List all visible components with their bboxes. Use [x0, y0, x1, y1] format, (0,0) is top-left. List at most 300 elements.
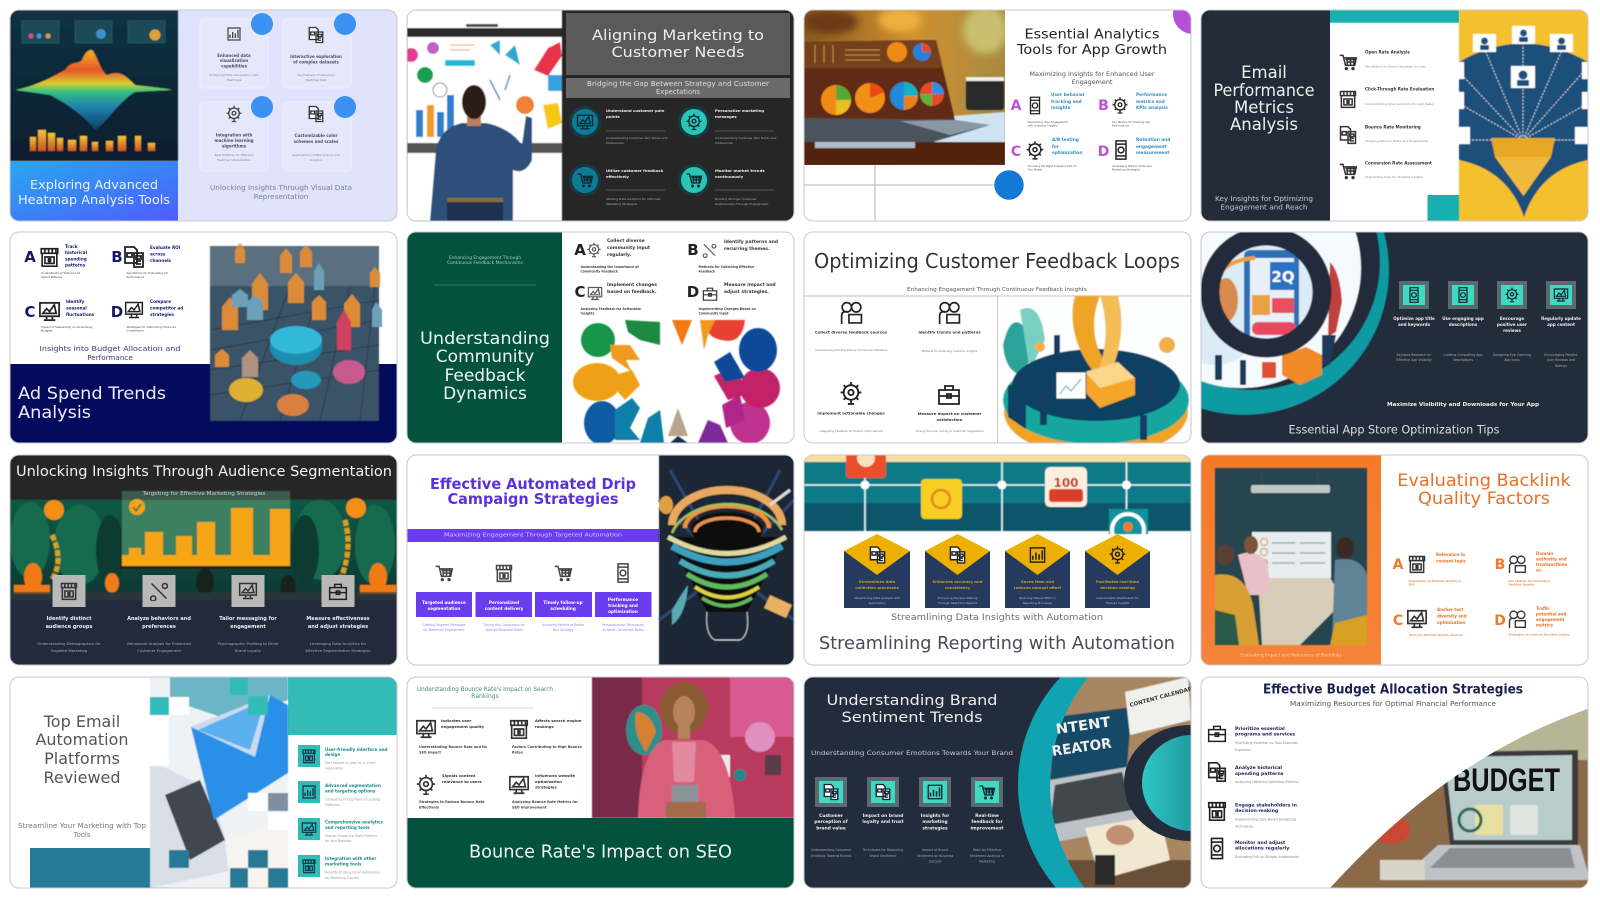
card: Optimizing Customer Feedback Loops	[804, 232, 1191, 457]
card: Exploring Advanced Heatmap Analysis Tools	[10, 10, 397, 221]
item C: based on feedback.	[607, 288, 657, 294]
item: understand pain points	[569, 106, 667, 145]
item: collect	[815, 303, 888, 352]
item B: Backlink Quality	[1508, 582, 1534, 586]
title band: Heatmap Analysis Tools	[18, 192, 170, 206]
benefit: real-time: Facilitates real-time	[1096, 578, 1139, 584]
item A: A	[574, 241, 586, 259]
network banner illustration	[804, 449, 1191, 546]
item: engage: Engage stakeholders in	[1235, 802, 1297, 808]
item A: tracking and	[1051, 98, 1082, 104]
platform: integration: Benefits of Using Email Automation	[325, 870, 380, 874]
title box: Customer Needs	[612, 45, 744, 61]
platform: interface	[298, 745, 387, 770]
item A	[1011, 92, 1086, 128]
item: website optimization	[510, 772, 578, 810]
tip: update content: Encouraging Positive	[1544, 353, 1578, 357]
step: personalized	[476, 566, 532, 632]
subtitle: Maximizing Insights for Enhanced User	[1030, 70, 1155, 78]
metric: bounce	[1340, 124, 1429, 143]
item: tailor messaging: Brand Loyalty	[235, 648, 262, 652]
item D	[687, 282, 776, 316]
item: content relevance: Signals content	[442, 772, 476, 778]
tip: reviews: positive user	[1497, 322, 1527, 326]
item D: Investments	[126, 328, 144, 332]
factor: loyalty: Brand Sentiment	[870, 854, 897, 858]
item D: Traffic	[1536, 606, 1550, 610]
metric: open rate: Key Metrics for Email Campaign Success	[1365, 64, 1426, 68]
item: analyze behaviors: preferences	[142, 624, 176, 630]
card: Bounce Rate's Impact on SEO	[407, 677, 794, 888]
factor: feedback: Sentiment Analysis in	[970, 854, 1004, 858]
factor: feedback: feedback for	[971, 818, 1003, 824]
content creator desk photo: REATOR	[1051, 736, 1113, 760]
step: targeted: for Maximum Engagement	[423, 628, 465, 632]
title: Streamlining Reporting with Automation	[819, 634, 1175, 654]
tip: title and keywords: Optimize app title	[1393, 316, 1435, 320]
content creator desk photo: NTENT	[1055, 714, 1112, 738]
item: engagement quality: engagement quality	[441, 724, 485, 728]
step: performance: tracking and	[608, 602, 638, 608]
audience funnel illustration	[1452, 10, 1594, 221]
item: measure: Closing the Loop: Acting on Customer Suggestions	[915, 429, 984, 433]
benefit: data collection: Streamlines data	[859, 578, 896, 584]
benefit: accuracy: Enhances accuracy and	[933, 578, 983, 584]
tip: update content	[1541, 281, 1581, 368]
item B: across	[150, 251, 166, 256]
item: measure: satisfaction	[937, 416, 963, 422]
item D: adjust strategies.	[724, 288, 769, 294]
metric: click-through: Click-Through Rate Evaluation	[1365, 86, 1434, 92]
tip: reviews: App Icons	[1504, 358, 1520, 362]
tip: update content: Ratings	[1555, 364, 1567, 368]
card: Aligning Marketing to Customer Needs	[404, 10, 794, 221]
benefit: data collection	[844, 534, 910, 608]
item D: engagement	[1136, 144, 1166, 150]
step: targeted	[416, 566, 472, 632]
step: personalized: Optimal Response Rates	[485, 628, 523, 632]
card: Unlocking Insights Through Audience Segmentation	[10, 455, 397, 665]
title: Unlocking Insights Through Audience Segmentation	[16, 464, 392, 480]
metric: conversion: Segmenting Data for Targeted Insights	[1365, 175, 1423, 179]
item D: strategies	[150, 312, 174, 316]
item A: patterns	[65, 262, 86, 267]
tip: update content: User Reviews and	[1547, 358, 1575, 362]
item D	[111, 298, 183, 332]
feature card: color schemes	[283, 96, 356, 171]
title: Tools for App Growth	[1016, 42, 1167, 58]
tip: descriptions	[1442, 281, 1484, 362]
jungle and audience illustration	[10, 455, 397, 665]
subtitle: Key Insights for Optimizing	[1215, 194, 1313, 202]
item D: potential and	[1536, 611, 1566, 616]
step: performance	[595, 564, 652, 632]
item D: competitor ad	[150, 305, 183, 310]
item A: Track	[65, 244, 78, 248]
factor: loyalty: Techniques for Measuring	[862, 848, 903, 852]
ring and phone illustration: 2Q	[1271, 268, 1295, 286]
step: follow-up: Your Strategy	[553, 628, 574, 632]
step: follow-up	[535, 566, 592, 632]
item: identify groups: Identify distinct	[47, 616, 92, 622]
item: monitor trends: Building Stronger Customer	[715, 197, 757, 201]
kicker: Continuous Feedback Mechanisms	[447, 260, 524, 266]
card: Effective Budget Allocation Strategies	[1201, 677, 1590, 890]
item C: Budgets	[41, 328, 53, 332]
item: measure: Measure impact on customer	[918, 410, 981, 416]
item D: engagement	[1536, 616, 1564, 622]
subtitle box: Expectations	[656, 88, 700, 96]
title: Understanding	[420, 329, 550, 349]
feature card: interactive exploration: of complex datasets	[293, 59, 339, 64]
item B: B	[1495, 557, 1505, 573]
platform: integration: marketing tools	[325, 861, 362, 866]
item: website optimization: SEO Improvement	[512, 806, 547, 810]
item A: Spend Patterns	[41, 275, 63, 279]
item: search rankings: rankings	[535, 724, 554, 728]
feature card: interactive exploration: Heatmap Tools	[305, 78, 327, 82]
item B: Methods for Collecting Effective	[698, 265, 754, 269]
factor: insights: Insights for	[921, 812, 950, 818]
item: prioritize: programs and services	[1235, 731, 1295, 737]
item A: User behavior	[1051, 92, 1086, 98]
item C: A/B testing	[1052, 136, 1079, 142]
feature card: color schemes: Applications in Data Science and	[292, 153, 340, 157]
benefit: data collection: Streamlining Data Analysis with	[854, 596, 900, 600]
platform: segmentation	[298, 781, 381, 807]
item: tailor messaging	[218, 575, 279, 652]
card: Understanding Brand Sentiment Trends	[804, 627, 1334, 900]
title: Reviewed	[43, 768, 121, 786]
card: Ad Spend Trends Analysis	[10, 232, 397, 443]
platform: analytics	[298, 818, 383, 843]
metric: click-through: Understanding Open and Click-Through Rates	[1365, 102, 1434, 106]
subtitle box	[566, 78, 790, 98]
title: Essential App Store Optimization Tips	[1288, 424, 1500, 436]
feature card: data visualization: Enhancing Data Visualization with	[209, 73, 259, 77]
meeting room photo	[1215, 468, 1367, 645]
factor: feedback: Tools for Effective	[972, 848, 1001, 852]
factor: perception	[811, 777, 852, 858]
platform: interface: design	[325, 752, 340, 756]
item: prioritize: Expenses	[1235, 748, 1251, 752]
speech bubble and arrow ring illustration	[573, 320, 780, 445]
title: Sentiment Trends	[842, 710, 982, 726]
item: tailor messaging: Tailor messaging for	[219, 616, 277, 622]
item D: metrics	[1536, 622, 1554, 627]
item D: D	[111, 303, 123, 321]
factor: perception: perception of	[814, 818, 848, 824]
item: personalize messages: Personalize marketing	[715, 108, 764, 112]
item: engage: decision-making	[1235, 808, 1278, 814]
step: personalized: Personalized	[489, 600, 519, 604]
title band	[10, 161, 178, 221]
platform: analytics: How to Choose the Right Platform	[325, 834, 377, 838]
item: identify: Identify trends and patterns	[918, 330, 981, 334]
green title band	[407, 818, 794, 888]
item B: Identify patterns and	[724, 238, 778, 244]
item D: Strategies for Optimizing Future Ad	[126, 325, 176, 329]
platform: integration	[298, 855, 380, 880]
metric: bounce: Analyzing Bounce Rates and Deliverability	[1365, 139, 1429, 143]
item A: A	[1393, 557, 1404, 573]
item A: Collect diverse	[607, 238, 645, 244]
item B	[687, 238, 778, 274]
item C: Anchor text	[1437, 606, 1463, 612]
factor: insights: Sentiment on Business	[917, 854, 954, 858]
item C: Tools for Backlink Quality Analysis	[1409, 633, 1464, 637]
item C: fluctuations	[66, 312, 95, 316]
item: identify	[918, 303, 981, 353]
item B: Key Metrics for Tracking App	[1112, 120, 1150, 124]
item D: D	[1494, 613, 1506, 629]
benefit: accuracy: Enhancing Decision-Making	[938, 596, 978, 600]
factor: perception: Understanding Consumer	[811, 848, 852, 852]
feature card: machine learning	[200, 96, 273, 171]
metric: open rate: Open Rate Analysis	[1365, 50, 1410, 54]
subtitle box: Bridging the Gap Between Strategy and Customer	[587, 80, 769, 88]
feature card: color schemes: Customizable color	[295, 132, 337, 138]
item: monitor: Evaluating ROI on Budget Investments	[1235, 855, 1299, 859]
title: Optimizing Customer Feedback Loops	[814, 249, 1180, 273]
item: website optimization: optimization	[535, 778, 562, 784]
item: identify groups: Understanding Demographics for	[37, 640, 101, 646]
factor: feedback	[970, 777, 1004, 864]
benefit: saves time: reduces manual effort	[1014, 584, 1061, 590]
card: Evaluating Backlink Quality Factors	[1201, 455, 1588, 665]
item: tailor messaging: engagement	[230, 624, 266, 630]
item C: Choosing the Right Analytics Tool for	[1028, 164, 1078, 168]
item: analyze behaviors	[127, 575, 191, 652]
factor: feedback: Real-time	[975, 812, 999, 818]
metric: bounce: Bounce Rate Monitoring	[1365, 124, 1421, 130]
feedback loop illustration	[998, 296, 1191, 457]
green title band: Bounce Rate's Impact on SEO	[469, 842, 732, 862]
item A: Community Feedback	[580, 270, 619, 274]
item C: Your Needs	[1028, 168, 1043, 172]
card: Streamlining Reporting with Automation	[804, 449, 1191, 665]
item A: Understanding Historical Ad	[41, 271, 80, 275]
feature card: interactive exploration: Key Features of Advanced	[297, 73, 335, 77]
title: Essential Analytics	[1024, 27, 1160, 42]
item B: B	[111, 248, 123, 266]
title: Ad Spend Trends	[18, 384, 166, 404]
item D: Measure impact and	[724, 282, 776, 288]
feature card: data visualization: visualization	[220, 58, 248, 62]
kicker: Enhancing Engagement Through	[449, 254, 521, 260]
item D: Implementing Changes Based on	[698, 307, 756, 311]
benefit: real-time: Tailored Insights	[1105, 601, 1130, 605]
item C	[24, 298, 95, 332]
item A: A	[24, 248, 36, 266]
item: implement: Integrating Feedback for Product Improvement	[819, 429, 883, 433]
card: Understanding Community Feedback Dynamics	[407, 232, 794, 445]
item B: recurring themes.	[724, 246, 770, 252]
platform: segmentation: Comparing Pricing Plans of Leading	[325, 798, 380, 802]
benefit: accuracy	[925, 534, 990, 608]
item C	[1011, 136, 1082, 172]
metric: click-through	[1340, 86, 1434, 107]
benefit: real-time: Customizable Dashboards for	[1096, 596, 1140, 600]
step: targeted: Targeted audience	[422, 600, 466, 604]
item B: KPIs analysis	[1136, 104, 1168, 110]
title: Automation	[36, 730, 128, 748]
item: utilize feedback: Utilize customer feedback	[606, 168, 664, 172]
content creator desk photo: CONTENT CALENDAR	[1129, 686, 1194, 709]
item: measure effectiveness: and adjust strategies	[308, 624, 368, 630]
item D: Marketing Strategies	[1112, 168, 1141, 172]
caption: Evaluating Impact and Relevance of Backlinks	[1240, 652, 1342, 658]
card: Effective Automated Drip Campaign Strategies	[407, 455, 794, 665]
item B: B	[1098, 98, 1109, 114]
item: monitor trends: continuously	[715, 174, 744, 178]
item D: Compare	[150, 298, 171, 304]
tagline: Maximize Visibility and Downloads for Your App	[1387, 402, 1539, 408]
step: follow-up: scheduling	[550, 606, 576, 610]
step: targeted: Crafting Targeted Messages	[423, 623, 466, 627]
title: Analysis	[18, 403, 91, 423]
tip: descriptions: descriptions	[1449, 322, 1478, 326]
tip: update content: Regularly update	[1541, 316, 1581, 320]
title: Analysis	[1230, 114, 1298, 134]
item B: Performance	[126, 275, 145, 279]
benefit: real-time	[1085, 534, 1150, 608]
benefit: data collection: collection processes	[855, 584, 899, 590]
feature card: machine learning: Integration with	[216, 132, 252, 137]
item: prioritize	[1209, 726, 1298, 752]
tip: title and keywords: Effective App Visibility	[1396, 358, 1432, 362]
metric: open rate	[1340, 50, 1426, 70]
item D: Retention and	[1136, 136, 1170, 142]
item A: regularly.	[607, 252, 632, 258]
subtitle: Streamlining Data Insights with Automation	[891, 613, 1103, 623]
item: website optimization: Analyzing Bounce Rate Metrics for	[512, 800, 578, 804]
factor: perception: Customer	[819, 812, 844, 818]
title: Effective Budget Allocation Strategies	[1263, 682, 1523, 698]
title: Email	[1241, 62, 1287, 82]
factor: feedback: improvement	[970, 825, 1004, 831]
step: performance: optimization	[608, 608, 638, 614]
platform: integration: for Marketing Success	[325, 876, 359, 880]
item: measure effectiveness: Leveraging Data Analytics for	[310, 640, 367, 646]
item: monitor: Monitor and adjust	[1235, 840, 1286, 846]
item: identify: Methods for Collecting Customer Insights	[922, 349, 978, 353]
item: personalize messages	[678, 106, 776, 145]
item B: Domain	[1536, 550, 1553, 556]
item: analyze	[1209, 763, 1299, 784]
item A: historical	[65, 250, 88, 254]
item A: A	[1011, 98, 1022, 114]
item: identify groups: audience groups	[46, 624, 92, 630]
step: personalized: Timing Your Campaigns for	[482, 623, 526, 627]
title: Top Email	[43, 712, 120, 730]
3D chart photo	[210, 243, 382, 421]
item: search rankings: Affects search engine	[535, 718, 582, 722]
card: Essential App Store Optimization Tips	[1099, 125, 1588, 443]
factor: insights: strategies	[922, 825, 948, 831]
item A: spending	[65, 256, 87, 261]
item: prioritize: Prioritizing Essential vs. Non-Essential	[1235, 741, 1298, 745]
item D: measurement	[1136, 150, 1169, 156]
budget laptop photo	[1320, 700, 1590, 890]
item C: Analyzing Feedback for Actionable	[580, 307, 641, 311]
item: implement	[817, 382, 885, 433]
item A	[24, 244, 88, 279]
benefit: accuracy: Through Real-Time Reports	[937, 601, 977, 605]
item C: C	[574, 283, 586, 301]
item A: Maximizing User Engagement	[1028, 120, 1068, 124]
item C: Identify	[66, 298, 85, 304]
item B: Feedback	[698, 270, 716, 274]
platform: integration: Integration with other	[325, 856, 376, 860]
benefit: data collection: Automation	[869, 601, 886, 605]
feature card: machine learning: Best Practices for Effective	[215, 153, 254, 157]
step: performance: to Boost Conversion Rates	[603, 628, 644, 632]
subtitle: Tools	[73, 831, 91, 839]
card: Essential Analytics Tools	[804, 10, 1190, 220]
item D	[1494, 606, 1570, 636]
item C: Insights	[580, 312, 595, 316]
factor: loyalty: Impact on brand	[863, 812, 903, 818]
item: content relevance: Strategies to Reduce Bounce Rate	[419, 800, 485, 804]
title: Platforms	[44, 748, 120, 768]
item: monitor trends: Relationships Through Engagement	[715, 202, 769, 206]
subtitle: Understanding Bounce Rate's Impact on Search	[417, 686, 553, 692]
subtitle: Rankings	[471, 692, 499, 700]
item: search rankings: Factors Contributing to High Bounce	[512, 745, 582, 749]
factor: feedback: Marketing	[979, 860, 995, 864]
item: content relevance: Effectively	[419, 806, 440, 810]
feature card: interactive exploration	[283, 13, 356, 88]
item D: Community Input	[698, 312, 729, 316]
whiteboard photo with presenter	[404, 10, 562, 221]
title: Campaign Strategies	[448, 490, 619, 508]
item: personalize messages: Understanding Customer Pain Points and	[715, 136, 776, 140]
title: Quality Factors	[1418, 489, 1550, 509]
item: analyze: Analyzing Historical Spending Patterns	[1235, 780, 1299, 784]
platform: analytics: for Your Business	[325, 839, 352, 843]
feature card: machine learning: algorithms	[222, 143, 247, 148]
item: analyze behaviors: Behavioral Analysis for Enhanced	[127, 640, 191, 646]
item: measure	[915, 386, 984, 433]
tip: reviews: Designing Eye-Catching	[1493, 353, 1531, 357]
item A: SEO	[1408, 582, 1415, 586]
factor: loyalty	[862, 777, 904, 858]
item D: Strategies to Improve Backlink Quality	[1508, 632, 1570, 636]
item D: D	[1098, 144, 1109, 160]
benefit: saves time: Saves time and	[1021, 578, 1054, 584]
item: engagement quality: SEO Impact	[419, 750, 441, 754]
subtitle: Enhancing Engagement Through Continuous Feedback Insights	[907, 287, 1087, 293]
item B: Key Metrics for Evaluating Ad	[126, 271, 168, 275]
subtitle: Representation	[254, 192, 308, 200]
item B: metrics and	[1136, 98, 1165, 104]
metric: conversion: Conversion Rate Assessment	[1365, 160, 1432, 166]
step: follow-up: Timely follow-up	[543, 600, 583, 604]
item: engagement quality: Indicates user	[441, 718, 471, 722]
tip: reviews: Encourage	[1500, 316, 1524, 320]
item: understand pain points: Understand customer pain	[606, 108, 665, 112]
item D: D	[687, 283, 699, 301]
title: Effective Automated Drip	[430, 475, 636, 493]
item C: C	[24, 303, 36, 321]
platform: interface: Top Features to Look for in Email	[324, 761, 376, 765]
item: collect: Understanding the Importance of Customer Feedback	[815, 348, 888, 352]
item: utilize feedback: Utilizing Data Analytics for Informed	[606, 197, 660, 201]
blue circle accent	[994, 170, 1024, 200]
subtitle band	[407, 529, 659, 542]
item B: channels	[150, 258, 172, 262]
